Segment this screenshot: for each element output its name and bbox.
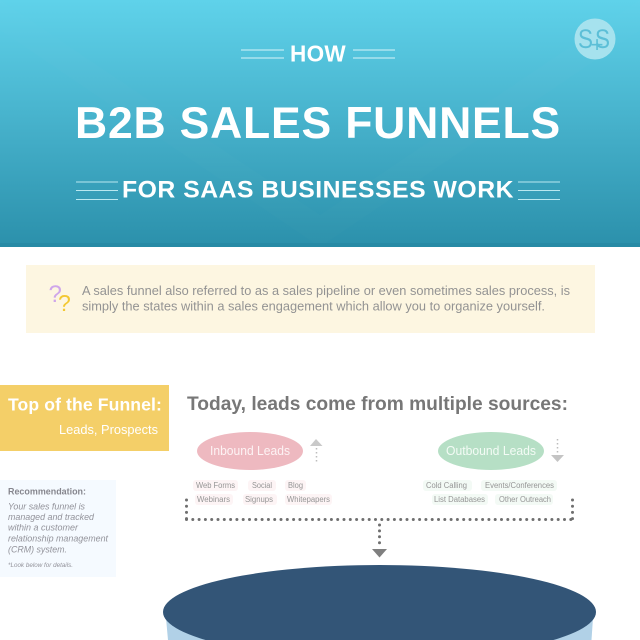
panel: recommendation: Your sales funnel is — [8, 502, 85, 512]
panel: recommendation: within a customer — [8, 522, 79, 532]
outbound source tags: Cold Calling — [426, 481, 467, 490]
panel: top of the funnel — [0, 385, 169, 451]
funnel — [163, 565, 596, 640]
icon: question marks: ? — [48, 281, 62, 308]
inbound source tags: Whitepapers — [287, 495, 330, 504]
panel: recommendation: managed and tracked — [8, 512, 95, 522]
icon: S+S logo — [574, 18, 616, 60]
arrow: dotted connector into funnel — [186, 500, 572, 558]
definition text: simply the states within a sales engagement which allow you to organize yourself. — [82, 298, 545, 314]
panel: top of the funnel: Leads, Prospects — [59, 423, 158, 437]
inbound leads: Inbound Leads — [210, 444, 290, 458]
panel: top of the funnel: Top of the Funnel: — [8, 394, 162, 414]
icon: question marks: ? — [58, 290, 71, 316]
inbound source tags: Webinars — [197, 495, 230, 504]
arrow: up — [310, 439, 322, 463]
heading: HOW: HOW — [290, 40, 346, 66]
heading: lead sources: Today, leads come from multiple sources: — [187, 394, 568, 415]
panel: recommendation: Recommendation: — [8, 486, 86, 496]
heading: HOW — [241, 40, 395, 66]
header banner — [0, 0, 640, 247]
inbound source tags: Blog — [288, 481, 303, 490]
arrow: down — [551, 439, 564, 462]
inbound source tags: Social — [252, 481, 272, 490]
outbound leads — [423, 432, 564, 505]
inbound source tags — [193, 480, 332, 505]
icon: S+S logo: S — [595, 24, 610, 54]
inbound leads — [193, 432, 332, 505]
panel: recommendation — [0, 480, 116, 577]
icon: question marks — [48, 281, 71, 316]
outbound source tags — [423, 480, 557, 505]
title: B2B SALES FUNNELS — [75, 99, 561, 148]
definition text: A sales funnel also referred to as a sales pipeline or even sometimes sales process, is — [82, 283, 570, 298]
inbound source tags: Web Forms — [196, 481, 235, 490]
definition text — [82, 283, 570, 314]
outbound source tags: Other Outreach — [499, 495, 551, 504]
outbound source tags: Events/Conferences — [485, 481, 554, 490]
inbound source tags: Signups — [245, 495, 273, 504]
outbound source tags: List Databases — [434, 495, 485, 504]
subtitle: FOR SAAS BUSINESSES WORK — [122, 176, 514, 204]
icon: S+S logo: S — [578, 24, 593, 54]
outbound leads: Outbound Leads — [446, 444, 536, 458]
panel: recommendation: (CRM) system. — [8, 544, 67, 554]
panel: recommendation: relationship management — [8, 534, 108, 544]
panel: recommendation: *Look below for details. — [8, 563, 73, 569]
callout: definition — [26, 265, 595, 333]
icon: S+S logo: + — [591, 32, 603, 57]
